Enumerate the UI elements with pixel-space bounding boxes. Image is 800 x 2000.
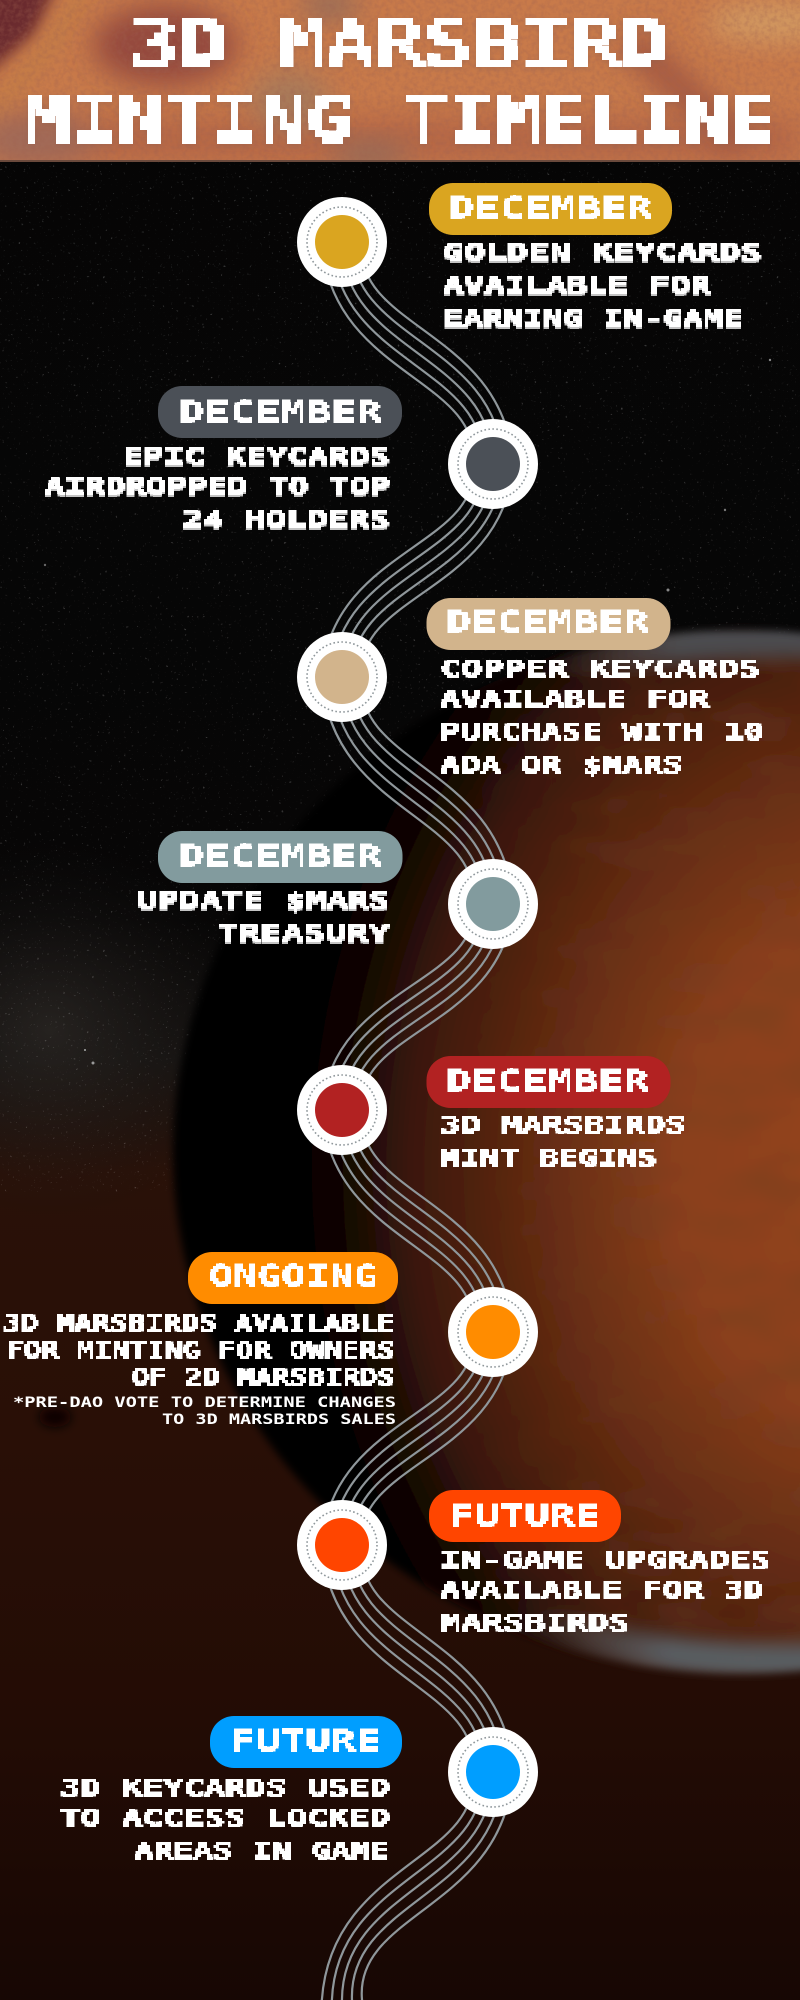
description [137,888,390,947]
title: 3D MARSBIRD [130,7,669,80]
milestone 7: in-game upgrades [297,1490,771,1637]
timeline connector lines [322,242,513,2000]
date pill: DECEMBER [179,839,382,873]
description: GOLDEN KEYCARDS [443,240,762,266]
description: ADA OR $MARS [440,753,683,779]
milestone 1: golden keycards [297,183,762,332]
milestone 6: ongoing minting [3,1252,538,1428]
footnote: TO 3D MARSBIRDS SALES [162,1412,396,1428]
description: FOR MINTING FOR OWNERS [6,1339,395,1364]
date pill: ONGOING [209,1259,378,1293]
description: MINT BEGINS [440,1146,657,1172]
description: UPDATE $MARS [137,888,390,914]
description: PURCHASE WITH 10 [440,720,764,746]
date pill: DECEMBER [446,1064,649,1098]
description: AREAS IN GAME [134,1839,390,1865]
milestone 5: mint begins [297,1056,686,1172]
date pill: FUTURE [449,1499,600,1533]
title [23,7,778,156]
node marker [297,632,387,722]
date pill [429,183,672,235]
description: TO ACCESS LOCKED [60,1806,390,1832]
node marker [448,859,538,949]
node marker [448,1287,538,1377]
description: 3D MARSBIRDS AVAILABLE [3,1312,395,1337]
description: EPIC KEYCARDS [122,444,390,470]
description: COPPER KEYCARDS [440,657,760,683]
description: AVAILABLE FOR [443,273,711,299]
footnote: *PRE-DAO VOTE TO DETERMINE CHANGES [13,1395,396,1411]
description: AIRDROPPED TO TOP [44,474,390,500]
description: 3D MARSBIRDS [440,1113,686,1139]
description: AVAILABLE FOR 3D [440,1578,764,1604]
description: MARSBIRDS [440,1611,630,1637]
description [60,1776,390,1865]
date pill: DECEMBER [449,191,652,225]
milestone 8: 3d keycards [60,1716,538,1865]
node marker [448,419,538,509]
description [443,240,762,332]
node marker [448,1727,538,1817]
node marker [297,1500,387,1590]
description: TREASURY [217,921,390,947]
milestone 4: update treasury [137,831,538,949]
date pill [429,1490,621,1542]
description: EARNING IN-GAME [443,306,743,332]
node marker [297,197,387,287]
description: OF 2D MARSBIRDS [132,1366,395,1391]
header banner [0,0,800,169]
node marker [297,1065,387,1155]
description [44,444,390,533]
date pill [158,831,402,883]
description [3,1312,395,1391]
date pill: DECEMBER [446,605,649,639]
description: 24 HOLDERS [182,507,390,533]
description: AVAILABLE FOR [440,687,709,713]
date pill [210,1716,402,1768]
description [440,657,764,779]
description: IN-GAME UPGRADES [440,1548,771,1574]
date pill [426,598,670,650]
date pill: DECEMBER [179,395,382,429]
milestone 3: copper keycards [297,598,764,779]
planet [150,600,800,1700]
date pill [426,1056,670,1108]
date pill: FUTURE [230,1724,381,1758]
date pill [158,386,402,438]
milestone 2: epic keycards [44,386,538,533]
description [440,1548,771,1637]
description: 3D KEYCARDS USED [60,1776,390,1802]
title: MINTING TIMELINE [23,83,778,156]
footnote [13,1395,396,1428]
description [440,1113,686,1172]
date pill [188,1252,398,1304]
